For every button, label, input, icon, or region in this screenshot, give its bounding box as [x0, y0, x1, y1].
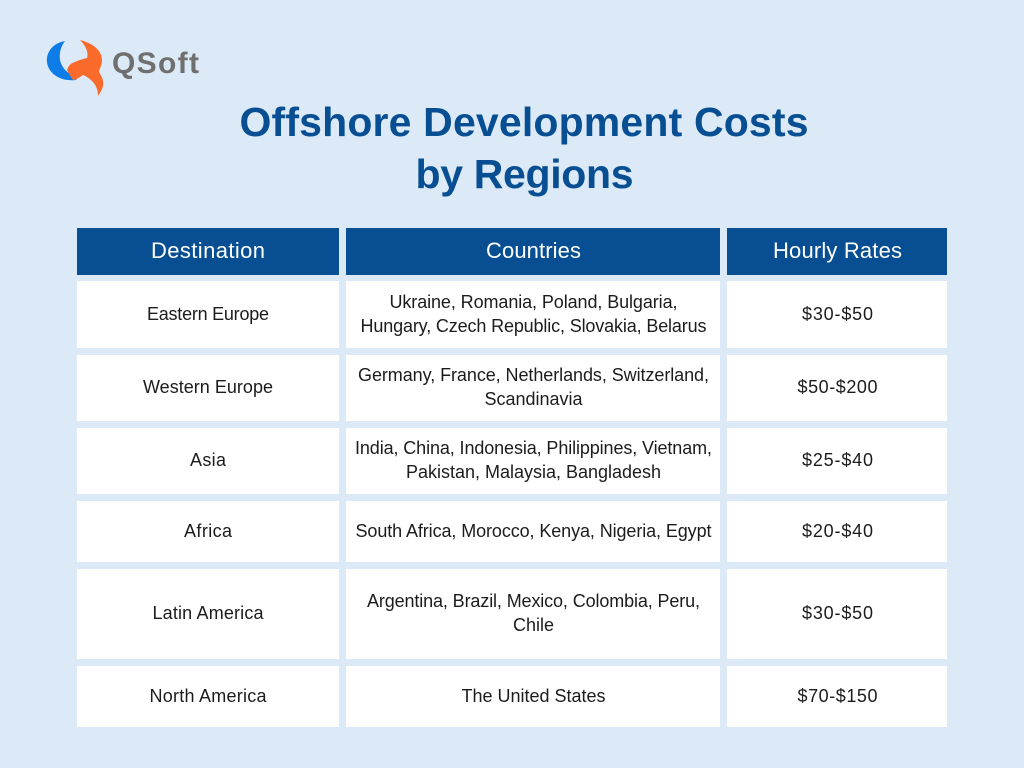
table header: Countries — [346, 228, 720, 275]
title: Offshore Development Costs — [240, 99, 808, 145]
row: Asia: Pakistan, Malaysia, Bangladesh — [406, 462, 661, 482]
table header: Destination: Destination — [151, 238, 265, 263]
row: North America — [77, 666, 947, 727]
title — [240, 99, 808, 197]
row: Western Europe — [77, 355, 947, 421]
row: Asia: $25-$40 — [802, 450, 873, 470]
row: Asia: India, China, Indonesia, Philippines, Vietnam, — [355, 438, 712, 458]
row: Western Europe: Western Europe — [143, 377, 273, 397]
row: Africa — [77, 501, 947, 562]
row: Africa: $20-$40 — [802, 521, 873, 541]
table header: Hourly Rates: Hourly Rates — [773, 238, 902, 263]
row: Latin America — [77, 569, 947, 659]
row: Africa: South Africa, Morocco, Kenya, Nigeria, Egypt — [356, 521, 712, 541]
row: Eastern Europe: Eastern Europe — [147, 304, 269, 324]
row: North America: The United States — [462, 686, 606, 706]
icon: blue crescent — [47, 41, 78, 80]
row: Africa: Africa — [184, 521, 233, 541]
row: Eastern Europe — [77, 281, 947, 348]
row: North America: North America — [150, 686, 267, 706]
row: Latin America: Latin America — [152, 603, 264, 623]
row: Western Europe: Scandinavia — [484, 389, 583, 409]
row: Asia: Asia — [190, 450, 227, 470]
table header: Hourly Rates — [727, 228, 947, 275]
table header: Countries: Countries — [486, 238, 581, 263]
row: Western Europe: Germany, France, Netherlands, Switzerland, — [358, 365, 709, 385]
row: Asia — [77, 428, 947, 494]
table header: Destination — [77, 228, 339, 275]
row: Eastern Europe: $30-$50 — [802, 304, 873, 324]
row: Latin America: $30-$50 — [802, 603, 873, 623]
row: North America: $70-$150 — [798, 686, 878, 706]
row: Eastern Europe: Hungary, Czech Republic, Slovakia, Belarus — [360, 316, 706, 336]
row: Latin America: Argentina, Brazil, Mexico, Colombia, Peru, — [367, 591, 700, 611]
title: by Regions — [416, 151, 634, 197]
row: Latin America: Chile — [513, 615, 554, 635]
row: Eastern Europe: Ukraine, Romania, Poland, Bulgaria, — [390, 292, 678, 312]
logo wordmark: QSoft — [112, 47, 199, 80]
logo: QSoft — [47, 40, 199, 96]
icon: orange bird — [67, 40, 103, 96]
row: Western Europe: $50-$200 — [798, 377, 878, 397]
